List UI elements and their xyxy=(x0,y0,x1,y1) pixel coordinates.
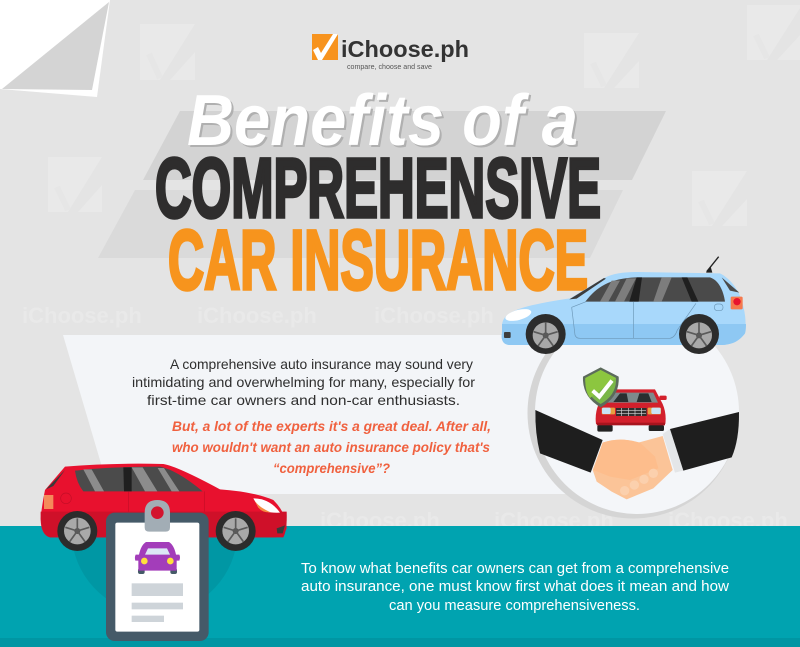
icon: clasped hands xyxy=(593,436,673,499)
title line: Benefits of a: Benefits of a xyxy=(189,83,580,163)
watermark text xyxy=(22,303,788,533)
footer paragraph: auto insurance, one must know first what does it mean and how xyxy=(301,579,730,595)
handshake illustration xyxy=(528,308,739,518)
panel: intro xyxy=(63,335,600,494)
footer paragraph: can you measure comprehensiveness. xyxy=(389,598,640,614)
watermark text: iChoose.ph xyxy=(494,508,614,533)
logo mark xyxy=(312,34,338,60)
circle backdrop xyxy=(528,308,739,518)
watermark text: iChoose.ph xyxy=(668,508,788,533)
teal footer band xyxy=(0,526,800,647)
icon: red car front xyxy=(596,389,667,432)
intro paragraph: first-time car owners and non-car enthusiasts. xyxy=(147,392,460,408)
highlighted question: who wouldn't want an auto insurance policy that's xyxy=(172,439,490,455)
intro paragraph xyxy=(132,356,475,408)
title backing stripes xyxy=(98,111,666,258)
title line: Benefits of a: Benefits of a xyxy=(187,81,578,161)
watermark text: iChoose.ph xyxy=(320,508,440,533)
highlighted question: But, a lot of the experts it's a great deal. After all, xyxy=(172,418,491,434)
intro paragraph: intimidating and overwhelming for many, especially for xyxy=(132,374,475,390)
clipboard clip xyxy=(145,500,170,532)
highlighted question: “comprehensive”? xyxy=(273,460,390,476)
icon: right sleeve xyxy=(670,412,739,471)
watermark text: iChoose.ph xyxy=(374,303,494,328)
icon: green shield with check xyxy=(583,367,619,407)
icon: clipboard with car xyxy=(106,500,209,641)
form lines xyxy=(132,583,183,622)
title xyxy=(155,81,601,307)
logo tagline: compare, choose and save xyxy=(347,62,432,71)
logo wordmark: iChoose.ph xyxy=(341,36,469,62)
footer paragraph xyxy=(301,561,730,614)
watermark check squares xyxy=(48,5,800,226)
icon: red hatchback xyxy=(41,464,287,551)
intro paragraph: A comprehensive auto insurance may sound very xyxy=(170,356,473,372)
footer paragraph: To know what benefits car owners can get from a comprehensive xyxy=(301,561,729,577)
turned page corner xyxy=(0,0,110,97)
logo xyxy=(312,34,469,71)
icon: purple car xyxy=(135,542,180,574)
watermark text: iChoose.ph xyxy=(22,303,142,328)
clipboard backdrop circle xyxy=(72,526,237,614)
icon: right cuff xyxy=(663,429,683,473)
icon: left sleeve xyxy=(535,410,603,473)
watermark text: iChoose.ph xyxy=(197,303,317,328)
icon: blue station wagon xyxy=(502,257,746,354)
highlighted question xyxy=(172,418,491,476)
